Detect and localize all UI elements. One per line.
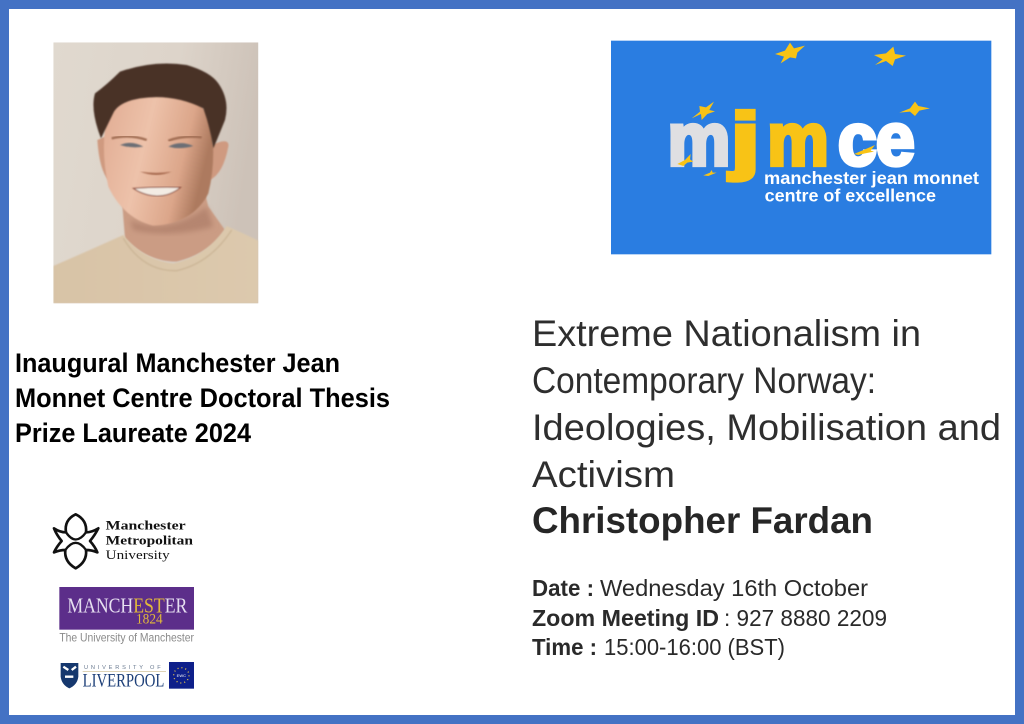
University of Liverpool logo: UNIVERSITY OF [84,665,161,671]
University of Manchester logo: 1824 [136,612,163,628]
portrait photo [53,42,258,303]
mjmce wordmark: j [728,98,760,181]
mjmce wordmark: m [767,98,829,181]
zoom id: Zoom Meeting ID [532,605,719,631]
speaker name: Christopher Fardan [532,500,873,541]
prize heading [15,348,390,448]
MJMCE logo [611,41,991,254]
date: Date : [532,575,594,601]
University of Liverpool logo: EWC [177,673,186,678]
mjmce wordmark: c [838,98,877,181]
neck [122,197,224,262]
chin shadow [130,207,213,233]
event details [532,575,887,660]
sweater [53,226,258,303]
Manchester Metropolitan logo: Metropolitan [106,533,193,547]
eyes [120,143,193,148]
mjmce wordmark [668,98,915,181]
talk title: Ideologies, Mobilisation and [532,407,1001,448]
face [104,90,213,226]
mjmce wordmark: m [668,98,730,181]
logo strapline: centre of excellence [765,185,936,205]
hair [93,63,226,148]
smile [133,187,181,196]
talk title [532,313,1001,495]
prize heading: Monnet Centre Doctoral Thesis [15,383,390,413]
stars over letters [677,145,875,166]
talk title: Activism [532,454,675,495]
zoom id: : 927 8880 2209 [724,605,887,631]
prize heading: Inaugural Manchester Jean [15,348,340,378]
mjmce wordmark: e [876,98,915,181]
time: Time : [532,634,597,660]
University of Manchester logo: MANCHESTER [67,595,188,617]
ears [97,137,228,180]
sweater collar [123,230,232,271]
zoom id [532,605,887,631]
Manchester Metropolitan logo: University [106,548,170,562]
time [532,634,785,660]
University of Liverpool logo: LIVERPOOL [83,671,164,692]
logo strapline [764,168,979,205]
eyebrows [112,137,202,141]
EU stars [692,43,930,176]
University of Manchester logo [59,587,194,645]
logo strapline: manchester jean monnet [764,168,979,188]
talk title: Contemporary Norway: [532,360,876,401]
Manchester Metropolitan logo [54,514,193,568]
university logos [54,514,194,692]
University of Liverpool logo [61,662,194,692]
Manchester Metropolitan logo: Manchester [106,519,186,533]
nose shadow [140,172,172,175]
University of Manchester logo: The University of Manchester [59,632,194,645]
time: 15:00-16:00 (BST) [604,634,785,660]
talk title: Extreme Nationalism in [532,313,921,354]
prize heading: Prize Laureate 2024 [15,418,251,448]
date: Wednesday 16th October [600,575,868,601]
